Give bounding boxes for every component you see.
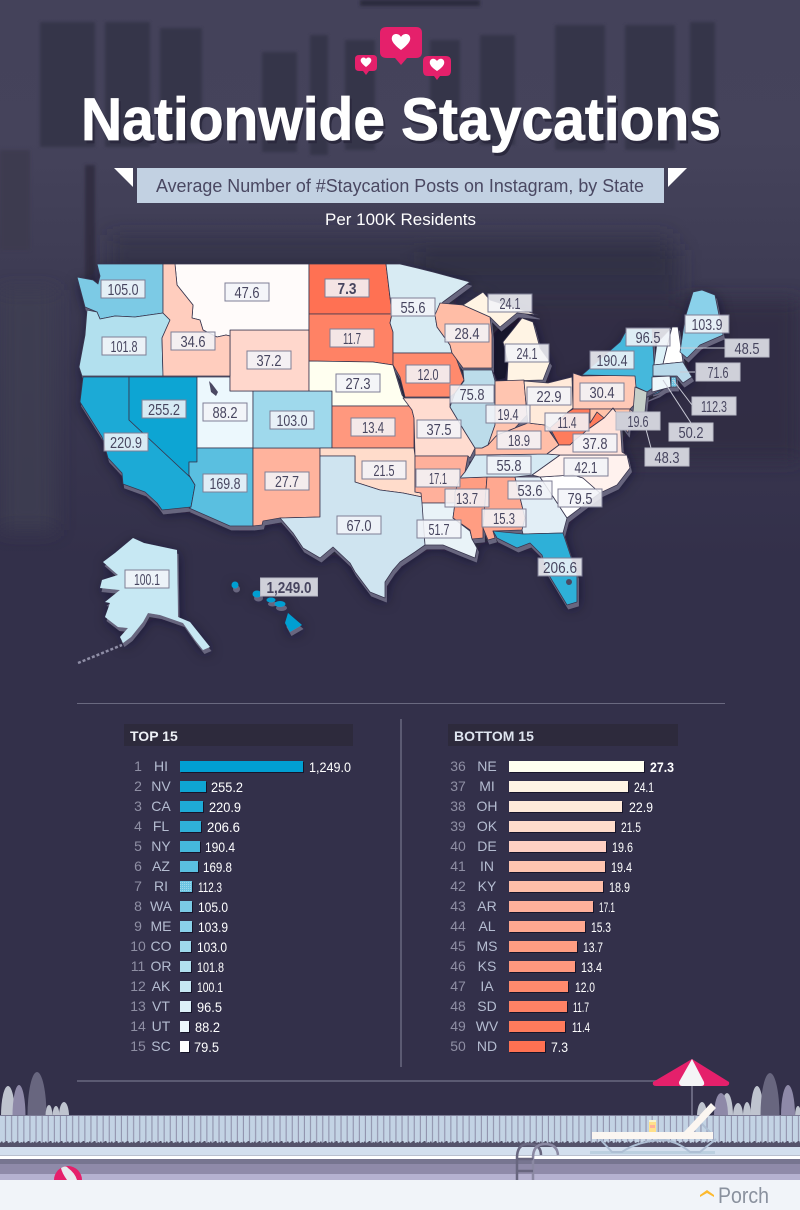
- row: UT: UT: [152, 1018, 171, 1034]
- state: Kentucky: [475, 423, 559, 455]
- heading: bottom 15: [448, 724, 678, 746]
- label: CO: 103.0: [276, 413, 308, 430]
- row: IA: 47: [450, 978, 466, 994]
- row: MS: MS: [476, 938, 498, 954]
- row: KY: 42: [450, 878, 466, 894]
- label: TX: 67.0: [346, 518, 372, 535]
- row: AZ: AZ: [152, 858, 170, 874]
- row: OH: 38: [450, 798, 466, 814]
- row: OK: OK: [477, 818, 498, 834]
- label: MI lower: 24.1: [516, 346, 538, 363]
- state: Hawaii: [232, 582, 302, 632]
- row: FL: 206.6: [207, 819, 240, 835]
- label: PA: 30.4: [590, 385, 615, 402]
- label: LA: [417, 520, 461, 539]
- label: IN: [486, 405, 530, 424]
- row: MS: 13.7: [583, 939, 603, 955]
- lake michigan dark basin: [492, 316, 520, 380]
- row: OK: 21.5: [621, 819, 641, 835]
- row: KS: KS: [478, 958, 496, 974]
- label: MT: 47.6: [234, 285, 260, 302]
- row: CO: 103.0: [197, 939, 227, 955]
- label: OR: 101.8: [110, 339, 138, 356]
- row: WA: [134, 898, 228, 915]
- row: IA: 12.0: [575, 979, 595, 995]
- row: RI: [134, 878, 222, 895]
- row: CA: CA: [151, 798, 171, 814]
- label: SC: 79.5: [568, 491, 593, 508]
- state: Arkansas: [415, 456, 468, 503]
- label: TX: [337, 516, 381, 535]
- row: KY: KY: [478, 878, 497, 894]
- bar chart: bottom 15 states: [450, 758, 674, 1055]
- label: WI: [445, 324, 489, 343]
- label: LA: 51.7: [428, 522, 450, 539]
- label: KY: 18.9: [508, 433, 530, 450]
- map: United States choropleth: [77, 264, 723, 650]
- row: NY: 5: [134, 838, 142, 854]
- heading: top 15: [124, 724, 353, 746]
- row: NV: NV: [151, 778, 171, 794]
- label: IN: 19.4: [498, 407, 519, 424]
- label: MD: [645, 448, 689, 467]
- state: Michigan upper peninsula: [463, 292, 538, 327]
- row: MI: 24.1: [634, 779, 654, 795]
- state: Idaho: [162, 264, 230, 376]
- state: Alaska: [100, 538, 210, 650]
- row: IN: IN: [480, 858, 494, 874]
- label: WV: [545, 413, 589, 432]
- state: Minnesota: [386, 264, 470, 353]
- label: WV: 11.4: [558, 415, 577, 432]
- state: North Carolina: [532, 455, 630, 493]
- state: Texas: [280, 456, 425, 598]
- row: UT: 88.2: [195, 1019, 220, 1035]
- state: Kansas: [332, 406, 414, 448]
- state: Nebraska: [309, 361, 412, 408]
- label: CA: 220.9: [110, 435, 142, 452]
- row: NE: NE: [477, 758, 497, 774]
- label: VA: 37.8: [582, 436, 608, 453]
- label: MO: 37.5: [426, 422, 452, 439]
- row: UT: 14: [130, 1018, 146, 1034]
- row: HI: 1: [134, 758, 142, 774]
- row: ME: [134, 918, 228, 935]
- row: DE: 40: [450, 838, 466, 854]
- row: WV: WV: [476, 1018, 499, 1034]
- row: OH: OH: [476, 798, 498, 814]
- row: CA: 3: [134, 798, 142, 814]
- section divider vertical: [400, 719, 402, 1067]
- row: WA: WA: [150, 898, 173, 914]
- state: Montana: [175, 264, 309, 337]
- row: SC: [130, 1038, 219, 1055]
- label: MN: [391, 298, 435, 317]
- row: IA: [450, 978, 595, 995]
- row: IN: 41: [450, 858, 466, 874]
- row: OR: 11: [131, 958, 145, 974]
- state: Wisconsin: [435, 303, 492, 368]
- row: NY: NY: [151, 838, 171, 854]
- label: NM: [265, 472, 309, 491]
- row: AK: 12: [130, 978, 146, 994]
- state: New Jersey: [633, 387, 647, 412]
- row: SC: 79.5: [194, 1039, 219, 1055]
- state: South Dakota: [309, 314, 393, 365]
- row: WV: [450, 1018, 590, 1035]
- row: SC: 15: [130, 1038, 146, 1054]
- row: KS: 13.4: [581, 959, 602, 975]
- label: CT: 50.2: [678, 425, 704, 442]
- row: IN: [450, 858, 632, 875]
- row: AZ: 6: [134, 858, 142, 874]
- icon: cocktail glass: [649, 1120, 656, 1132]
- state: Arizona: [189, 448, 253, 526]
- state: Alabama: [483, 477, 525, 540]
- illustration: pool deck and water: [0, 1147, 800, 1180]
- row: KY: [450, 878, 630, 895]
- state: Washington: [77, 264, 163, 319]
- state: Iowa: [393, 353, 464, 397]
- row: HI: 1,249.0: [309, 759, 351, 775]
- row: IA: IA: [480, 978, 494, 994]
- label: NC: 42.1: [574, 460, 598, 477]
- subheading: per 100K residents: Per 100K Residents: [325, 210, 476, 229]
- label: VT: 96.5: [636, 330, 661, 347]
- label: NE: 27.3: [346, 376, 371, 393]
- row: FL: 4: [134, 818, 142, 834]
- label: OH: [527, 387, 571, 406]
- row: CO: [130, 938, 227, 955]
- row: VT: [130, 998, 222, 1015]
- row: OH: 22.9: [629, 799, 653, 815]
- label: OH: 22.9: [536, 389, 562, 406]
- illustration: sun lounger: [590, 1103, 716, 1154]
- label: ME: 103.9: [692, 317, 723, 334]
- row: SD: SD: [477, 998, 497, 1014]
- row: NV: [134, 778, 243, 795]
- footer band: [0, 1180, 800, 1210]
- icon: like notification bubbles: [355, 27, 451, 80]
- label: MN: 55.6: [400, 300, 426, 317]
- row: NE: 36: [450, 758, 466, 774]
- row: AL: 44: [450, 918, 466, 934]
- row: FL: [134, 818, 240, 835]
- icon: small left heart bubble: [355, 55, 377, 75]
- label: NH: 48.5: [734, 341, 760, 358]
- row: ND: 50: [450, 1038, 466, 1054]
- state: Maine: [680, 290, 723, 358]
- state: North Dakota: [309, 264, 392, 314]
- state: Indiana: [488, 380, 527, 445]
- label: VT: [626, 328, 670, 347]
- label: AK: 100.1: [134, 572, 160, 589]
- row: DE: 19.6: [612, 839, 633, 855]
- illustration: pool ladder: [517, 1144, 558, 1180]
- state: Florida: [493, 531, 577, 605]
- row: NV: 255.2: [211, 779, 243, 795]
- label: PA: [580, 383, 624, 402]
- label: UT: 88.2: [212, 405, 238, 422]
- row: AR: AR: [477, 898, 497, 914]
- label: IL: 75.8: [460, 387, 485, 404]
- row: VT: 13: [130, 998, 146, 1014]
- row: AR: 17.1: [599, 899, 615, 915]
- icon: small right heart bubble: [423, 56, 451, 80]
- illustration: shrubs left: [1, 1072, 69, 1160]
- row: HI: [134, 758, 351, 775]
- row: NE: 27.3: [650, 759, 674, 775]
- section divider bottom: [77, 1080, 657, 1082]
- label: SC: [558, 489, 602, 508]
- icon: large heart bubble: [380, 27, 422, 65]
- row: WA: 8: [134, 898, 142, 914]
- label: FL: 206.6: [543, 560, 577, 577]
- row: ME: 9: [134, 918, 142, 934]
- state: Virginia: [547, 408, 627, 455]
- lake detail: Utah salt lake: [209, 381, 218, 396]
- heading: top 15: TOP 15: [130, 728, 178, 744]
- bar chart: top 15 states: [130, 758, 351, 1055]
- row: MS: 45: [450, 938, 466, 954]
- label: RI: 112.3: [701, 399, 727, 416]
- label: KS: 13.4: [362, 420, 384, 437]
- row: MI: MI: [479, 778, 495, 794]
- label: OK: 21.5: [374, 463, 395, 480]
- label: OR: [102, 337, 146, 356]
- row: ME: 103.9: [198, 919, 228, 935]
- row: VT: VT: [152, 998, 170, 1014]
- state: Georgia: [515, 477, 567, 534]
- state: Maryland: [590, 408, 630, 433]
- row: WV: 49: [450, 1018, 466, 1034]
- subtitle ribbon: [114, 168, 687, 203]
- row: AK: [130, 978, 223, 995]
- state: Nevada: [129, 377, 197, 477]
- row: AL: [450, 918, 611, 935]
- label: CT: [669, 423, 713, 442]
- label: TN: [487, 456, 531, 475]
- label: MD: 48.3: [654, 450, 680, 467]
- row: SC: SC: [151, 1038, 171, 1054]
- state: West Virginia: [550, 409, 604, 445]
- lake detail: Florida Okeechobee: [566, 579, 572, 585]
- state: Wyoming: [230, 330, 309, 391]
- row: AK: AK: [152, 978, 171, 994]
- illustration: beach ball: [54, 1166, 82, 1180]
- row: CA: 220.9: [209, 799, 241, 815]
- row: KS: [450, 958, 602, 975]
- heading: bottom 15: BOTTOM 15: [454, 728, 534, 744]
- row: AL: 15.3: [591, 919, 611, 935]
- label: WI: 28.4: [454, 326, 480, 343]
- state: New Mexico: [253, 448, 320, 526]
- row: ND: 7.3: [551, 1039, 568, 1055]
- logo: Porch: Porch: [718, 1183, 769, 1208]
- row: WV: 11.4: [572, 1019, 590, 1035]
- row: WA: 105.0: [198, 899, 228, 915]
- row: OH: [450, 798, 653, 815]
- row: MI: [450, 778, 654, 795]
- label: HI: 1,249.0: [266, 580, 312, 597]
- label: SD: 11.7: [343, 331, 361, 348]
- row: CO: CO: [150, 938, 172, 954]
- state: Massachusetts: [653, 362, 692, 383]
- row: HI: HI: [154, 758, 168, 774]
- state: Ohio: [524, 377, 573, 428]
- label: WY: 37.2: [256, 353, 282, 370]
- row: SD: 48: [450, 998, 466, 1014]
- label: AR: 17.1: [429, 471, 447, 488]
- label: NY: 190.4: [596, 353, 628, 370]
- label: AL: 15.3: [493, 511, 515, 528]
- label: AZ: 169.8: [210, 476, 241, 493]
- row: IN: 19.4: [611, 859, 632, 875]
- label: MA: 71.6: [708, 365, 729, 382]
- row: OR: 101.8: [197, 959, 224, 975]
- label: MI upper: [488, 294, 532, 313]
- state: Missouri: [403, 398, 475, 458]
- label: KS: [351, 418, 395, 437]
- row: DE: [450, 838, 633, 855]
- row: OK: [450, 818, 641, 835]
- row: NV: 2: [134, 778, 142, 794]
- label: MS: 13.7: [456, 491, 478, 508]
- illustration: shrubs right: [697, 1073, 800, 1159]
- label: ND: 7.3: [338, 281, 357, 298]
- row: OR: [131, 958, 224, 975]
- row: AZ: 169.8: [203, 859, 232, 875]
- row: AZ: [134, 858, 232, 875]
- row: OR: OR: [150, 958, 172, 974]
- label: WY: [247, 351, 291, 370]
- row: CO: 10: [130, 938, 146, 954]
- label: ID: 34.6: [180, 334, 206, 351]
- label: OK: [362, 461, 406, 480]
- illustration: fence: [0, 1115, 800, 1147]
- row: SD: [450, 998, 589, 1015]
- row: VT: 96.5: [197, 999, 222, 1015]
- row: AK: 100.1: [197, 979, 223, 995]
- state: Colorado: [253, 391, 332, 448]
- label: VA: [573, 434, 617, 453]
- label: MI lower: [505, 344, 549, 363]
- subtitle ribbon: Average Number of #Staycation Posts on Instagram, by State: [156, 176, 644, 196]
- row: KY: 18.9: [609, 879, 630, 895]
- label: MI upper: 24.1: [500, 296, 521, 313]
- row: UT: [130, 1018, 220, 1035]
- row: ND: [450, 1038, 568, 1055]
- row: AR: [450, 898, 615, 915]
- label: WA: 105.0: [108, 282, 139, 299]
- row: ND: ND: [477, 1038, 497, 1054]
- state: Long Island: [645, 387, 667, 398]
- title: Nationwide Staycations: [81, 86, 721, 153]
- state: Oregon: [79, 310, 170, 376]
- row: OK: 39: [450, 818, 466, 834]
- label: ND: [325, 279, 369, 298]
- label: DE: [616, 412, 660, 431]
- state: Louisiana: [422, 503, 477, 558]
- label: AK: [125, 570, 169, 589]
- row: AL: AL: [478, 918, 496, 934]
- label: AR: [416, 469, 460, 488]
- label: KY: [497, 431, 541, 450]
- row: ME: ME: [150, 918, 172, 934]
- row: NY: 190.4: [205, 839, 235, 855]
- state: South Carolina: [540, 475, 600, 518]
- label: IA: [406, 365, 450, 384]
- state: Rhode Island: [671, 377, 677, 387]
- logo: Porch: [700, 1183, 769, 1208]
- label: MO: [417, 420, 461, 439]
- row: RI: 112.3: [198, 879, 222, 895]
- state: Connecticut: [652, 376, 671, 392]
- row: SD: 11.7: [573, 999, 589, 1015]
- state: New Hampshire: [663, 327, 683, 364]
- label: AL: [482, 509, 526, 528]
- label: ID: [171, 332, 215, 351]
- state: Delaware: [630, 409, 635, 425]
- state: New York: [582, 329, 654, 392]
- label: UT: [203, 403, 247, 422]
- map value labels: [101, 279, 769, 597]
- state: Illinois: [450, 370, 495, 448]
- state: Mississippi: [453, 477, 487, 539]
- row: KS: 46: [450, 958, 466, 974]
- state: Tennessee: [460, 454, 560, 478]
- state: Oklahoma: [320, 448, 422, 497]
- state: Vermont: [654, 327, 672, 365]
- label: GA: [508, 481, 552, 500]
- row: MI: 37: [450, 778, 466, 794]
- label: NC: [564, 458, 608, 477]
- label: NV: 255.2: [148, 402, 180, 419]
- label: NH: [725, 339, 769, 358]
- label: DE: 19.6: [628, 414, 649, 431]
- label: RI: [692, 397, 736, 416]
- label: NE: [336, 374, 380, 393]
- row: CA: [134, 798, 241, 815]
- row: NE: [450, 758, 674, 775]
- label: TN: 55.8: [496, 458, 522, 475]
- row: AR: 43: [450, 898, 466, 914]
- label: IA: 12.0: [418, 367, 439, 384]
- state: Pennsylvania: [573, 373, 647, 409]
- row: MS: [450, 938, 603, 955]
- state: California: [80, 377, 195, 510]
- label: IL: [450, 385, 494, 404]
- label: MA: [696, 363, 740, 382]
- alaska aleutian islands: [78, 645, 122, 663]
- label: MS: [445, 489, 489, 508]
- row: RI: 7: [134, 878, 142, 894]
- state: Utah: [197, 377, 253, 448]
- state: Michigan lower peninsula: [503, 318, 550, 381]
- label: GA: 53.6: [518, 483, 543, 500]
- label: NM: 27.7: [275, 474, 299, 491]
- leader lines for northeast labels: [643, 348, 725, 448]
- row: DE: DE: [477, 838, 497, 854]
- row: RI: RI: [154, 878, 168, 894]
- illustration: umbrella: [653, 1059, 729, 1148]
- label: SD: [330, 329, 374, 348]
- row: FL: FL: [153, 818, 169, 834]
- label: MT: [225, 283, 269, 302]
- row: NY: [134, 838, 235, 855]
- section divider top: [77, 703, 725, 704]
